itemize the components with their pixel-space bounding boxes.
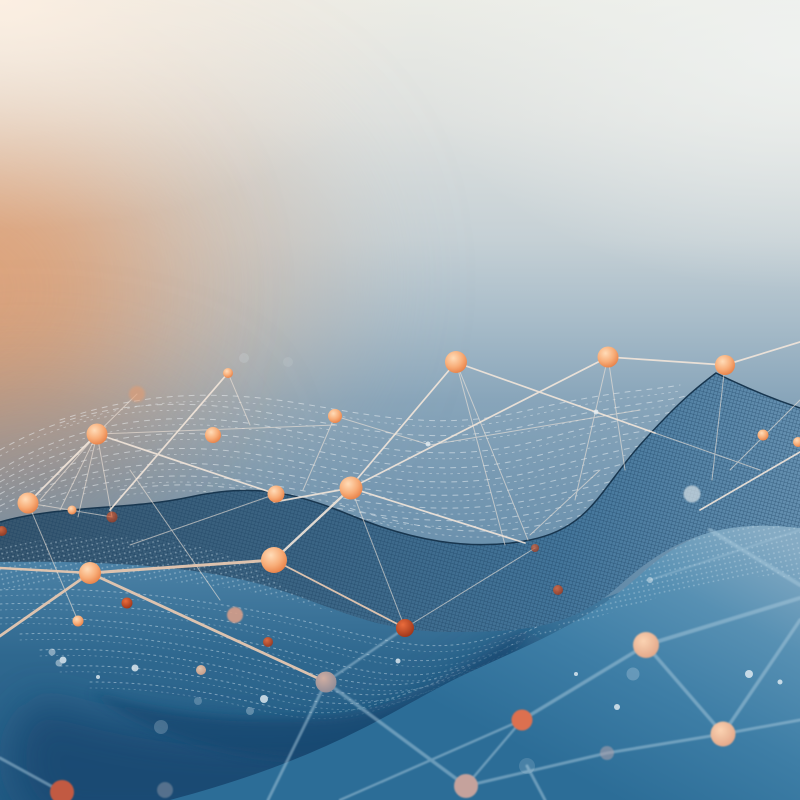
network connection lines	[0, 342, 800, 682]
lower web of dotted mesh lines	[0, 589, 560, 719]
blurred lines in the foreground	[0, 530, 800, 800]
pale fabric across left of band	[0, 537, 340, 615]
dark red network nodes	[0, 512, 563, 647]
upper web of dotted mesh lines	[0, 385, 690, 537]
lower body of the scene	[0, 510, 800, 800]
orange network nodes	[18, 346, 800, 626]
dark mesh wave band	[0, 373, 800, 632]
pale out-of-focus nodes	[50, 386, 736, 800]
light blue foreground wave	[170, 525, 800, 800]
dark shadow under the mesh	[12, 630, 560, 800]
dotted fabric on the foreground wave	[400, 525, 800, 690]
small scattered white dots	[48, 353, 782, 774]
